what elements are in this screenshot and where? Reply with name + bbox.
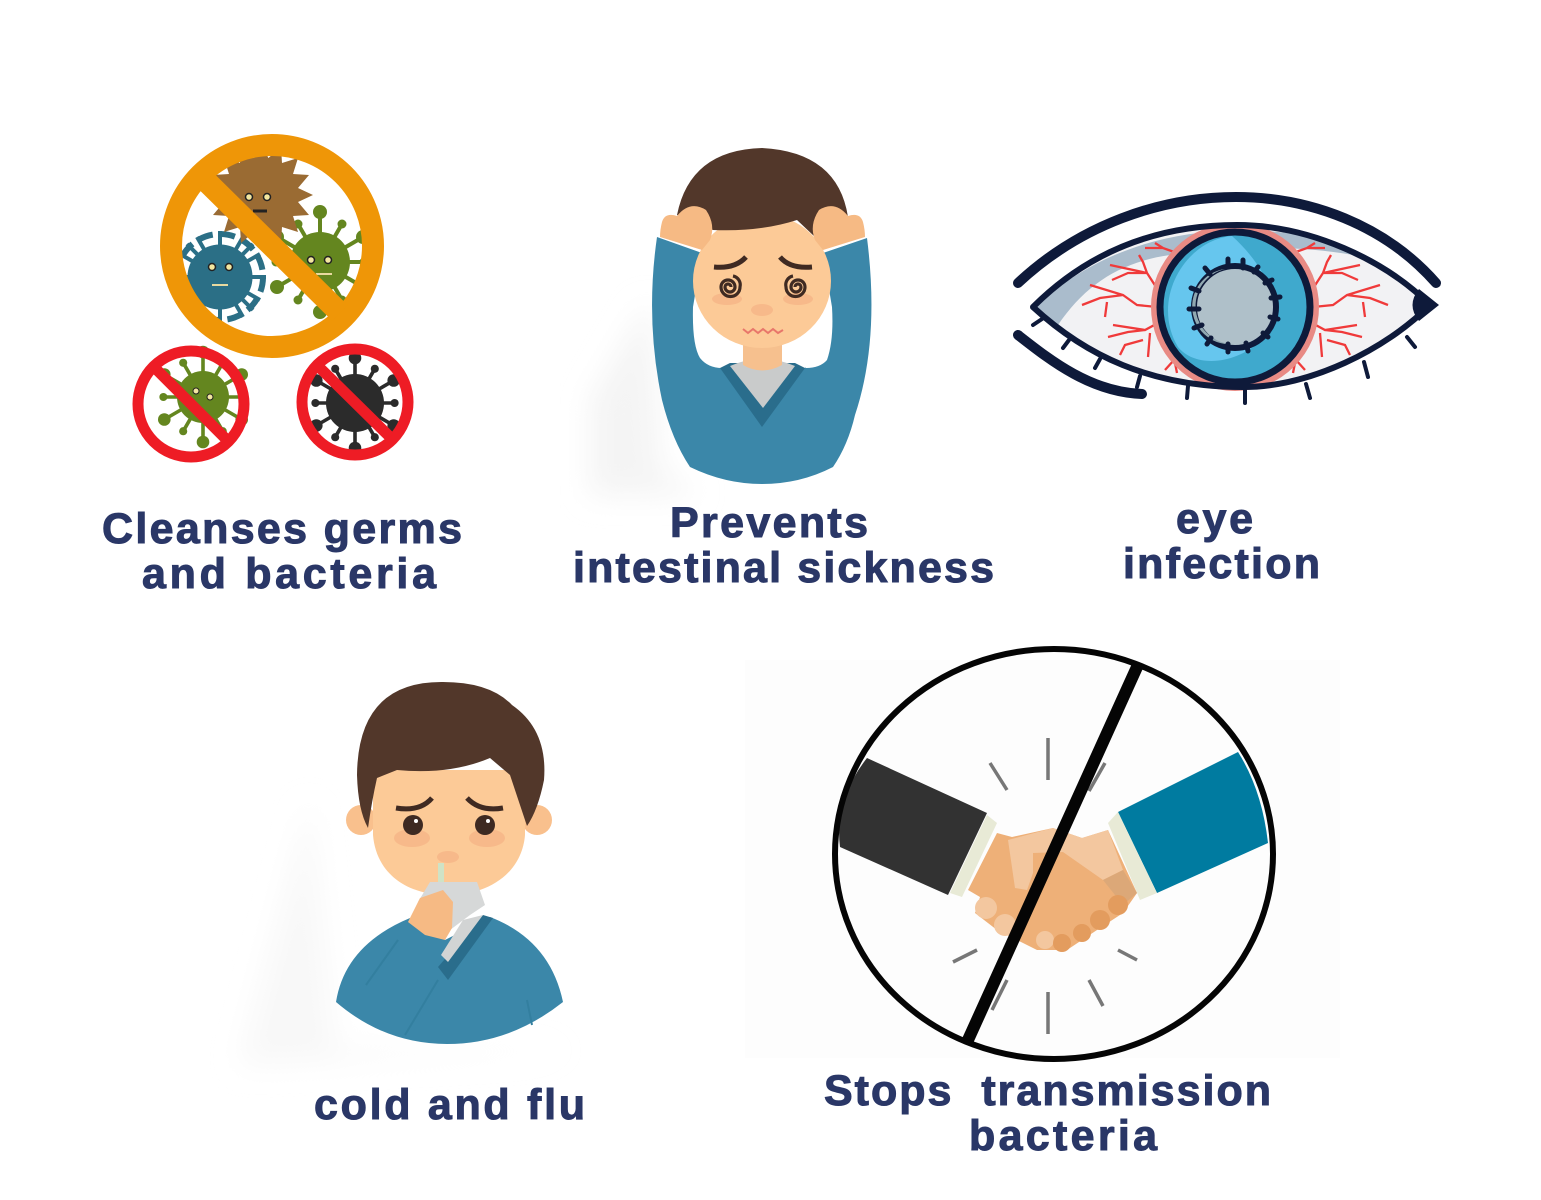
dark sleeve — [839, 758, 987, 895]
face — [394, 798, 505, 863]
red iris ring — [1151, 223, 1319, 391]
backdrop — [590, 300, 700, 495]
eye white — [1033, 225, 1430, 387]
backdrop — [240, 800, 570, 1065]
hands — [660, 206, 865, 250]
head — [693, 214, 831, 348]
backdrop — [745, 660, 1340, 1058]
head — [373, 770, 525, 895]
mouth — [743, 329, 783, 333]
teal sleeve — [1118, 752, 1268, 893]
hair — [357, 682, 544, 828]
icon: orange prohibition sign — [171, 145, 373, 347]
upper shade — [1036, 230, 1368, 325]
hands — [968, 828, 1137, 952]
v-neck collar — [720, 363, 805, 427]
icon: dizzy man — [590, 148, 871, 495]
lower lid — [1018, 335, 1142, 394]
pupil — [1194, 266, 1276, 348]
sweater folds — [366, 940, 532, 1035]
upper lid — [1018, 197, 1436, 283]
prohibition circle — [835, 649, 1273, 1059]
neck — [743, 340, 782, 370]
heading: infection: infection — [1123, 540, 1320, 588]
spark lines — [953, 738, 1137, 1034]
icon: no germs group — [138, 143, 408, 457]
heading: prevents: Prevents — [670, 499, 868, 547]
hair — [677, 148, 848, 237]
heading: stops transmission: Stops transmission — [824, 1067, 1271, 1115]
icon: brown germ — [209, 143, 313, 247]
icon: no handshake — [745, 649, 1340, 1059]
iris — [1160, 232, 1310, 382]
icon: teal germ — [174, 231, 266, 323]
heading: intestinal sickness: intestinal sickness — [573, 544, 994, 592]
sweater arms and body — [652, 237, 871, 484]
ears — [346, 805, 552, 835]
pupil ticks — [1189, 259, 1280, 352]
brows and dizzy eyes — [714, 257, 812, 296]
heading: cold and flu: cold and flu — [314, 1081, 585, 1129]
icon: green germ — [270, 205, 370, 319]
icon: red eye — [1018, 197, 1439, 403]
lashes — [1033, 319, 1415, 403]
collar — [438, 915, 493, 980]
heading: eye: eye — [1176, 495, 1253, 543]
icon: red prohibited black virus — [302, 349, 408, 455]
blush and nose — [712, 293, 813, 316]
heading: cleanses germs: Cleanses germs — [102, 505, 462, 553]
icon: man with cold — [240, 682, 570, 1065]
icon: red prohibited green virus — [138, 346, 248, 457]
sweater — [336, 917, 563, 1044]
heading: and bacteria: and bacteria — [142, 550, 437, 598]
shirt white sides — [693, 307, 832, 368]
tissue and hand — [408, 863, 485, 940]
red veins — [1082, 243, 1388, 373]
eye outline — [1033, 225, 1430, 387]
eye corner — [1412, 289, 1439, 321]
heading: bacteria: bacteria — [969, 1112, 1158, 1160]
